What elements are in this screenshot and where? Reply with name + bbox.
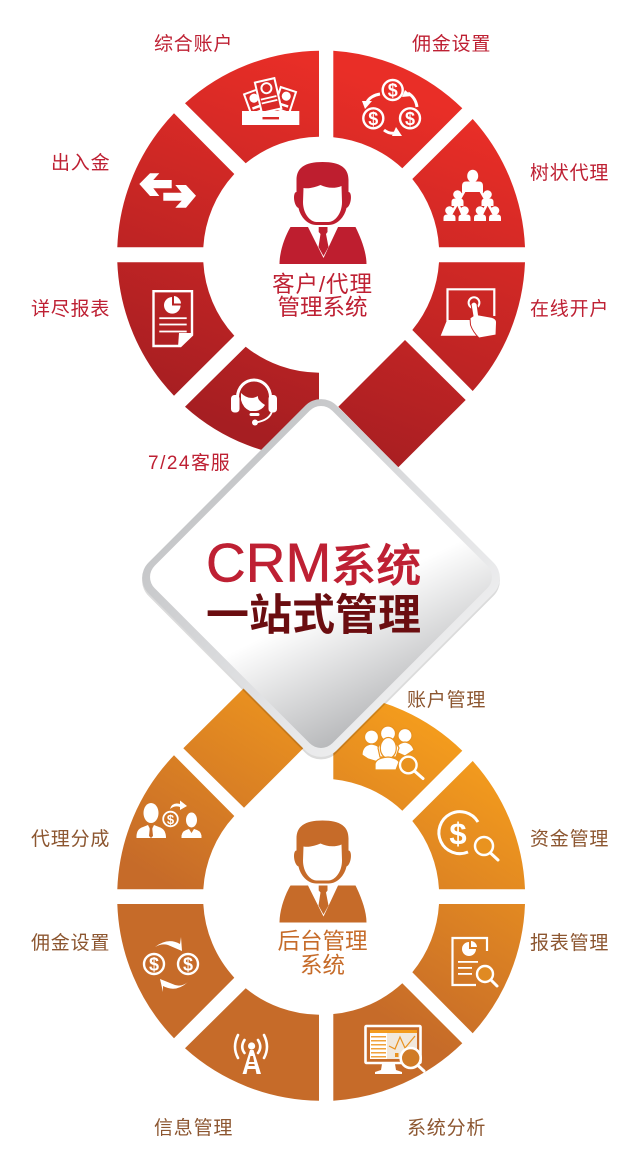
- segment: 系统分析: [333, 983, 462, 1101]
- icon: deposit and withdrawal arrows: [139, 173, 196, 208]
- segment: 资金管理: [412, 761, 525, 889]
- heading: lower wheel center label: [277, 929, 368, 978]
- icon: monitor with magnifier: [366, 1026, 424, 1074]
- label: 在线开户: 在线开户: [530, 298, 609, 320]
- panel: central diamond badge: [142, 399, 500, 759]
- panel: lower orange wheel: [117, 688, 525, 1101]
- icon: account inbox with papers: [242, 77, 299, 125]
- icon: commission cycle: $: [405, 109, 415, 129]
- segment: 报表管理: [412, 904, 525, 1033]
- icon: money with magnifier: [439, 812, 498, 860]
- segment: blank diamond: [338, 340, 466, 467]
- segment: 信息管理: [185, 988, 319, 1101]
- segment: 综合账户: [185, 51, 319, 163]
- icon: money with magnifier: $: [449, 816, 467, 851]
- icon: commission exchange: $: [149, 954, 159, 974]
- segment: blank diamond: [183, 688, 303, 808]
- icon: people with magnifier: [362, 726, 423, 778]
- label: 账户管理: 账户管理: [407, 689, 486, 711]
- icon: signal antenna: [235, 1035, 267, 1074]
- icon: headset agent: [231, 378, 277, 426]
- label: 出入金: 出入金: [51, 152, 110, 174]
- label: 详尽报表: 详尽报表: [31, 298, 110, 320]
- segment: 在线开户: [412, 262, 525, 391]
- icon: commission exchange: $: [183, 954, 193, 974]
- heading: upper wheel center label: 管理系统: [277, 295, 368, 320]
- label: 7/24客服: 7/24客服: [148, 452, 231, 474]
- icon: commission cycle: [362, 80, 420, 136]
- icon: commission cycle: $: [388, 80, 398, 100]
- icon: central person, orange: [280, 820, 366, 922]
- segment: 代理分成: [117, 755, 234, 889]
- segment: 树状代理: [412, 119, 525, 247]
- segment: 佣金设置: [333, 51, 462, 168]
- segment: 详尽报表: [117, 262, 234, 396]
- label: 报表管理: 报表管理: [530, 932, 609, 954]
- icon: agent commission split: [136, 800, 202, 838]
- icon: agent tree: [444, 170, 501, 221]
- panel: upper red wheel: [117, 51, 525, 467]
- segment: 佣金设置: [117, 904, 234, 1038]
- label: 树状代理: 树状代理: [530, 162, 609, 184]
- heading: CRM系统: CRM系统: [206, 532, 421, 594]
- icon: agent commission split: $: [167, 812, 175, 827]
- label: 资金管理: 资金管理: [530, 828, 609, 850]
- heading: 一站式管理: 一站式管理: [206, 592, 421, 640]
- icon: report document: [154, 291, 193, 347]
- heading: lower wheel center label: 系统: [300, 953, 345, 978]
- label: 佣金设置: 佣金设置: [412, 33, 491, 55]
- icon: commission cycle: $: [368, 109, 378, 129]
- segment: 出入金: [117, 113, 234, 247]
- label: 代理分成: 代理分成: [31, 828, 110, 850]
- label: 系统分析: 系统分析: [407, 1117, 486, 1139]
- heading: lower wheel center label: 后台管理: [277, 929, 368, 954]
- label: 佣金设置: 佣金设置: [31, 932, 110, 954]
- labels: upper wheel: [31, 33, 609, 474]
- segment: 账户管理: [333, 693, 462, 811]
- label: 信息管理: 信息管理: [154, 1117, 233, 1139]
- heading: upper wheel center label: [272, 272, 373, 320]
- icon: laptop with touching hand: [441, 289, 497, 338]
- icon: report with magnifier: [452, 938, 497, 986]
- icon: central person, red: [280, 162, 366, 264]
- icon: commission exchange: [144, 937, 198, 992]
- labels: lower wheel: [31, 689, 609, 1139]
- label: 综合账户: 综合账户: [154, 33, 233, 55]
- heading: upper wheel center label: 客户/代理: [272, 272, 373, 297]
- segment: 7/24客服: [185, 347, 319, 459]
